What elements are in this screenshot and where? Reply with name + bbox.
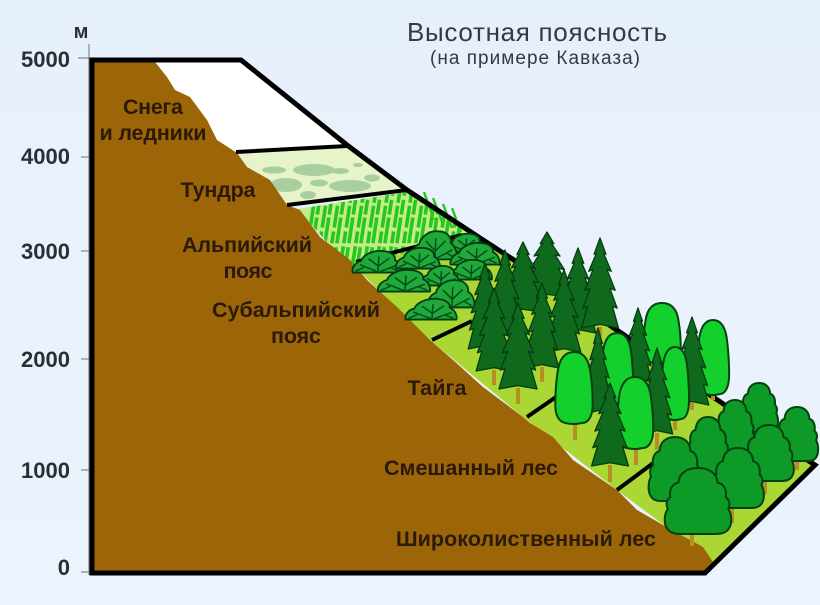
belt labels: Тайга <box>408 376 468 400</box>
altitude axis: 3000 <box>21 239 70 264</box>
belt labels: Альпийский <box>182 233 312 257</box>
zone: alpine belt grass <box>298 192 467 264</box>
belt labels: Субальпийский <box>212 298 380 322</box>
altitude axis <box>21 21 92 580</box>
belt labels: Смешанный лес <box>384 456 558 480</box>
zone: tundra <box>237 146 407 205</box>
title: (на примере Кавказа) <box>430 48 640 69</box>
altitude axis: м <box>74 21 88 43</box>
taiga spruces <box>468 232 618 389</box>
altitude axis: 1000 <box>21 458 70 483</box>
belt labels: Тундра <box>180 178 257 202</box>
belt labels <box>100 95 656 551</box>
broadleaf forest trees <box>649 383 818 534</box>
altitude axis: 2000 <box>21 347 70 372</box>
belt labels: Снега <box>123 95 184 119</box>
zone: lime forest ground <box>350 232 813 572</box>
belt labels: пояс <box>271 324 321 348</box>
belt labels: Широколиственный лес <box>396 527 656 551</box>
subalpine bushes <box>352 231 500 320</box>
trunks <box>494 327 797 546</box>
altitude axis: 5000 <box>21 47 70 72</box>
altitude axis: 0 <box>58 555 70 580</box>
belt dividers <box>236 146 660 490</box>
title: Высотная поясность <box>407 17 667 47</box>
zone: snow and glaciers <box>155 61 347 153</box>
title <box>407 17 667 69</box>
soil slope <box>92 60 713 573</box>
mixed forest trees <box>555 303 729 466</box>
belt labels: и ледники <box>100 121 206 145</box>
slope outline <box>92 60 815 573</box>
altitude axis: 4000 <box>21 144 70 169</box>
belt labels: пояс <box>224 259 273 283</box>
